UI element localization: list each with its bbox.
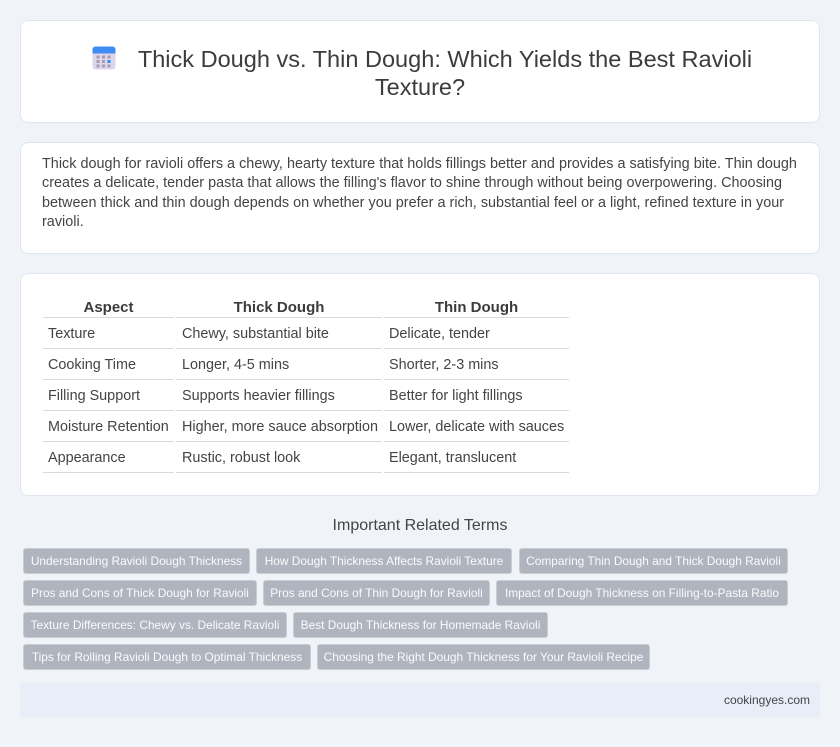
- row: texture: Texture: [48, 326, 95, 342]
- row: filling support: Filling Support: [48, 388, 140, 404]
- row: appearance: Rustic, robust look: [182, 450, 300, 466]
- row: cooking time: Longer, 4-5 mins: [182, 357, 289, 373]
- table header: Aspect: [83, 299, 134, 316]
- title: [138, 46, 752, 100]
- intro text panel: [20, 142, 820, 254]
- row: appearance: Appearance: [48, 450, 126, 466]
- row: texture: [48, 326, 490, 342]
- comparison table panel: [20, 273, 820, 496]
- tag: How Dough Thickness Affects Ravioli Texture: [265, 554, 503, 568]
- tag: Texture Differences: Chewy vs. Delicate Ravioli: [31, 618, 279, 632]
- row: cooking time: Cooking Time: [48, 357, 136, 373]
- tag: Best Dough Thickness for Homemade Ravioli: [301, 618, 540, 632]
- tag: [519, 548, 788, 574]
- tag: [317, 644, 650, 670]
- tag: [23, 548, 250, 574]
- row: filling support: Supports heavier fillings: [182, 388, 335, 404]
- footer bar: [20, 683, 820, 717]
- table header: Thin Dough: [435, 299, 518, 316]
- row: filling support: Better for light fillings: [389, 388, 523, 404]
- tag: Pros and Cons of Thin Dough for Ravioli: [270, 586, 483, 600]
- intro paragraph: Thick dough for ravioli offers a chewy, hearty texture that holds fillings better and provides a satisfying bite. Thin dough: [42, 156, 797, 172]
- row: texture: Chewy, substantial bite: [182, 326, 329, 342]
- footer source: cookingyes.com: [724, 693, 810, 707]
- table header: [83, 299, 518, 316]
- row: cooking time: Shorter, 2-3 mins: [389, 357, 499, 373]
- tag: [23, 580, 257, 606]
- tag: [293, 612, 548, 638]
- title: Thick Dough vs. Thin Dough: Which Yields the Best Ravioli: [138, 46, 752, 72]
- tag: [23, 612, 287, 638]
- row: appearance: [48, 450, 516, 466]
- row: moisture retention: Lower, delicate with sauces: [389, 419, 564, 435]
- row: appearance: Elegant, translucent: [389, 450, 516, 466]
- header card: [20, 20, 820, 123]
- tag: [263, 580, 490, 606]
- tag: Choosing the Right Dough Thickness for Your Ravioli Recipe: [324, 650, 643, 664]
- table header: Thick Dough: [234, 299, 324, 316]
- table: [43, 299, 569, 473]
- row: cooking time: [48, 357, 499, 373]
- intro paragraph: between thick and thin dough depends on whether you prefer a rich, substantial feel or a light, refined texture in your: [42, 195, 784, 211]
- tag: [496, 580, 788, 606]
- related terms heading: Important Related Terms: [333, 517, 507, 534]
- row: moisture retention: Higher, more sauce absorption: [182, 419, 378, 435]
- tag: [256, 548, 512, 574]
- tag: Pros and Cons of Thick Dough for Ravioli: [31, 586, 249, 600]
- tag: Impact of Dough Thickness on Filling-to-Pasta Ratio: [505, 586, 779, 600]
- row: texture: Delicate, tender: [389, 326, 490, 342]
- tag: Understanding Ravioli Dough Thickness: [31, 554, 242, 568]
- intro paragraph: creates a delicate, tender pasta that allows the filling's flavor to shine through without being overpowering. Choosing: [42, 175, 782, 191]
- title: Texture?: [375, 74, 465, 100]
- row: filling support: [48, 388, 523, 404]
- related terms tags: [23, 548, 788, 670]
- intro paragraph: [42, 156, 797, 230]
- row: moisture retention: Moisture Retention: [48, 419, 169, 435]
- tag: Comparing Thin Dough and Thick Dough Ravioli: [526, 554, 781, 568]
- tag: [23, 644, 311, 670]
- intro paragraph: ravioli.: [42, 214, 84, 230]
- row: moisture retention: [48, 419, 564, 435]
- tag: Tips for Rolling Ravioli Dough to Optimal Thickness: [32, 650, 302, 664]
- icon: calendar: [92, 46, 116, 70]
